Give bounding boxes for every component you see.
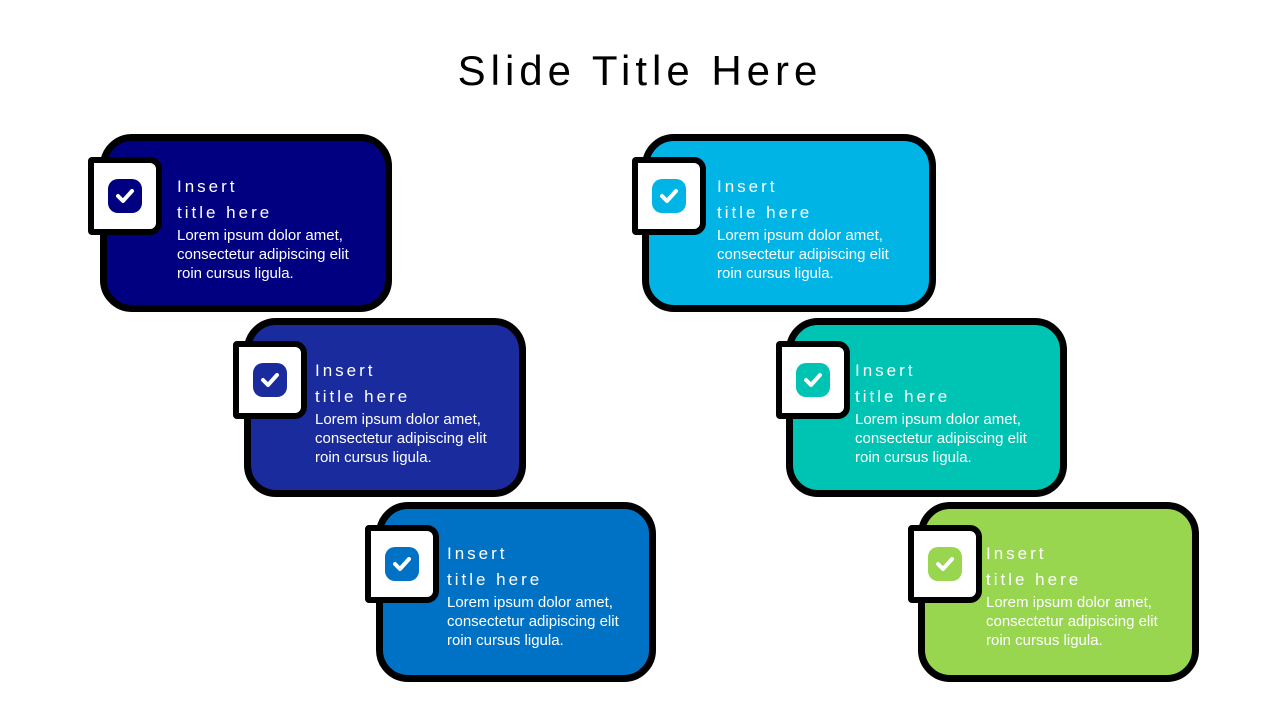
text block 1 — [177, 177, 349, 282]
text block 2: Insert — [315, 361, 376, 380]
panel: card 1 — [88, 134, 392, 312]
text block 6 — [986, 544, 1158, 649]
icon: checkbox 3 — [365, 525, 439, 603]
text block 3 — [447, 544, 619, 649]
text block 5: Insert — [855, 361, 916, 380]
text block 1: title here — [177, 203, 272, 222]
title: Slide Title Here — [458, 47, 822, 94]
text block 4: Lorem ipsum dolor amet, consectetur adipiscing elit roin cursus ligula. — [717, 227, 889, 282]
panel: card 2 — [233, 318, 526, 497]
text block 3: Lorem ipsum dolor amet, consectetur adipiscing elit roin cursus ligula. — [447, 594, 619, 649]
panel: card 4 — [632, 134, 936, 312]
text block 4: Insert — [717, 177, 778, 196]
text block 4 — [717, 177, 889, 282]
icon: checkbox 6 — [908, 525, 982, 603]
text block 2: title here — [315, 387, 410, 406]
text block 3: title here — [447, 570, 542, 589]
text block 1: Lorem ipsum dolor amet, consectetur adipiscing elit roin cursus ligula. — [177, 227, 349, 282]
text block 4: title here — [717, 203, 812, 222]
panel: card 5 — [776, 318, 1067, 497]
text block 1: Insert — [177, 177, 238, 196]
icon: checkbox 5 — [776, 341, 850, 419]
text block 3: Insert — [447, 544, 508, 563]
text block 5: title here — [855, 387, 950, 406]
icon: checkbox 4 — [632, 157, 706, 235]
text block 6: Lorem ipsum dolor amet, consectetur adipiscing elit roin cursus ligula. — [986, 594, 1158, 649]
text block 6: Insert — [986, 544, 1047, 563]
icon: checkbox 2 — [233, 341, 307, 419]
text block 5: Lorem ipsum dolor amet, consectetur adipiscing elit roin cursus ligula. — [855, 411, 1027, 466]
text block 2 — [315, 361, 487, 466]
icon: checkbox 1 — [88, 157, 162, 235]
panel: card 3 — [365, 502, 656, 682]
text block 5 — [855, 361, 1027, 466]
text block 6: title here — [986, 570, 1081, 589]
panel: card 6 — [908, 502, 1199, 682]
text block 2: Lorem ipsum dolor amet, consectetur adipiscing elit roin cursus ligula. — [315, 411, 487, 466]
